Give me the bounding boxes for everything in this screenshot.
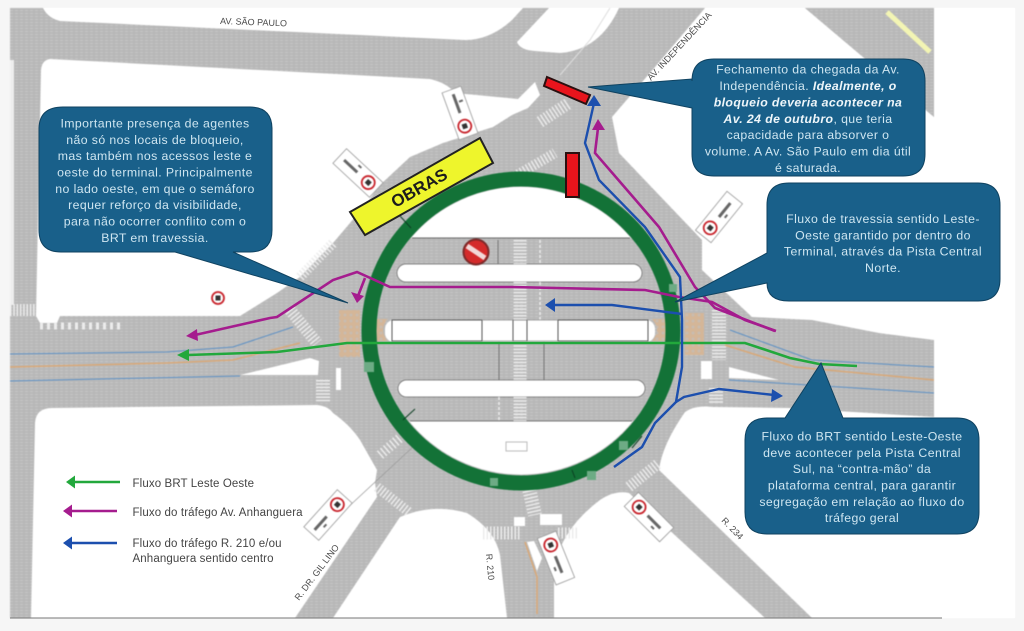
callout: fluxo BRT: Sul, na “contra-mão” da <box>793 462 931 476</box>
legend: BRT arrow <box>66 476 120 488</box>
callout: fechamento: capacidade para absorver o <box>727 128 889 142</box>
road label: R. Dr. Gil Lino: R. DR. GIL LINO <box>293 543 341 602</box>
callout: agentes: para não ocorrer conflito com o <box>64 214 246 228</box>
callout: fechamento: Fechamento da chegada da Av. <box>716 62 900 76</box>
callout: fechamento: Av. 24 de outubro, que teria <box>722 112 893 126</box>
legend: blue arrow <box>63 536 117 550</box>
yellow faded line <box>887 12 930 52</box>
callout: fluxo BRT: plataforma central, para garantir <box>768 478 956 492</box>
white block: east <box>659 407 934 618</box>
obras block: OBRAS <box>388 165 451 212</box>
white margin right <box>934 8 1015 618</box>
callout: fechamento: Independência. Idealmente, o <box>719 79 897 93</box>
legend: blue label: Fluxo do tráfego R. 210 e/ou <box>132 538 282 550</box>
legend: BRT label: Fluxo BRT Leste Oeste <box>132 478 254 490</box>
callout: travessia: Terminal, através da Pista Central <box>784 244 982 258</box>
callout: agentes: Importante presença de agentes <box>60 116 250 130</box>
legend: magenta label: Fluxo do tráfego Av. Anhanguera <box>132 507 303 519</box>
legend <box>63 476 303 565</box>
white block: north sliver <box>43 8 523 40</box>
callout: fluxo BRT: tráfego geral <box>825 511 899 525</box>
obras block <box>350 138 493 235</box>
callout: fluxo BRT: Fluxo do BRT sentido Leste-Oeste <box>762 430 962 444</box>
callout: fluxo BRT: deve acontecer pela Pista Central <box>763 446 961 460</box>
legend: blue label: Anhanguera sentido centro <box>132 553 274 565</box>
road label: Av. São Paulo: AV. SÃO PAULO <box>220 16 287 28</box>
callout: agentes: no lado oeste, em que o semáforo <box>55 182 255 196</box>
white block: south-centre <box>333 509 507 618</box>
callout: agentes: requer reforço da visibilidade, <box>68 198 242 212</box>
white block: north-west <box>36 59 540 323</box>
terminal interior <box>385 187 655 474</box>
callout: fluxo BRT <box>745 363 979 534</box>
white block: south-east <box>554 492 765 618</box>
callout: travessia: Fluxo de travessia sentido Leste- <box>786 212 980 226</box>
callout: fechamento: é saturada. <box>775 161 841 175</box>
callout: fechamento <box>588 59 925 176</box>
green terminal ring <box>364 179 677 486</box>
callout: agentes: mas também nos acessos leste e <box>58 149 252 163</box>
sign: south-east <box>624 492 674 542</box>
sign: south <box>537 531 575 585</box>
white block: south-west <box>31 405 377 618</box>
red barrier: terminal north <box>566 153 579 197</box>
callout: agentes: BRT em travessia. <box>101 231 209 245</box>
red barrier: Av. Independência <box>544 77 590 104</box>
orange hatched areas <box>339 310 704 357</box>
sign: north 1 <box>442 86 478 140</box>
callout: fechamento: bloqueio deveria acontecer na <box>714 96 902 110</box>
flow: BRT green <box>177 343 857 366</box>
traffic islands <box>240 358 779 571</box>
white block: north-east <box>612 8 934 340</box>
flow: Anhanguera magenta <box>186 119 776 341</box>
callout: travessia: Oeste garantido por dentro do <box>795 228 971 242</box>
small sign: west <box>212 292 224 304</box>
sign: north 2 <box>333 149 383 197</box>
crosswalks <box>10 103 719 533</box>
callout: agentes: oeste do terminal. Principalmente <box>57 166 253 180</box>
callout: fluxo BRT: segregação em relação ao fluxo do <box>759 495 965 509</box>
road label: R. 234: R. 234 <box>720 515 745 541</box>
callout: travessia <box>675 183 1000 302</box>
sign: south-west <box>304 490 352 540</box>
callout: travessia: Norte. <box>865 261 901 275</box>
bottom rule <box>10 617 942 619</box>
white block: north centre <box>517 8 619 53</box>
legend: magenta arrow <box>63 504 117 518</box>
callout: fechamento: volume. A Av. São Paulo em dia útil <box>705 144 911 158</box>
callout: agentes: não só nos locais de bloqueio, <box>66 133 244 147</box>
road end right gray <box>805 8 934 117</box>
road label: R. 210: R. 210 <box>484 553 496 581</box>
callout: agentes <box>39 107 348 303</box>
road label: Av. Independência: AV. INDEPENDÊNCIA <box>645 10 714 82</box>
sign: east <box>695 191 743 243</box>
no-entry icon <box>464 240 488 264</box>
flow: R. 210 blue <box>545 95 783 467</box>
